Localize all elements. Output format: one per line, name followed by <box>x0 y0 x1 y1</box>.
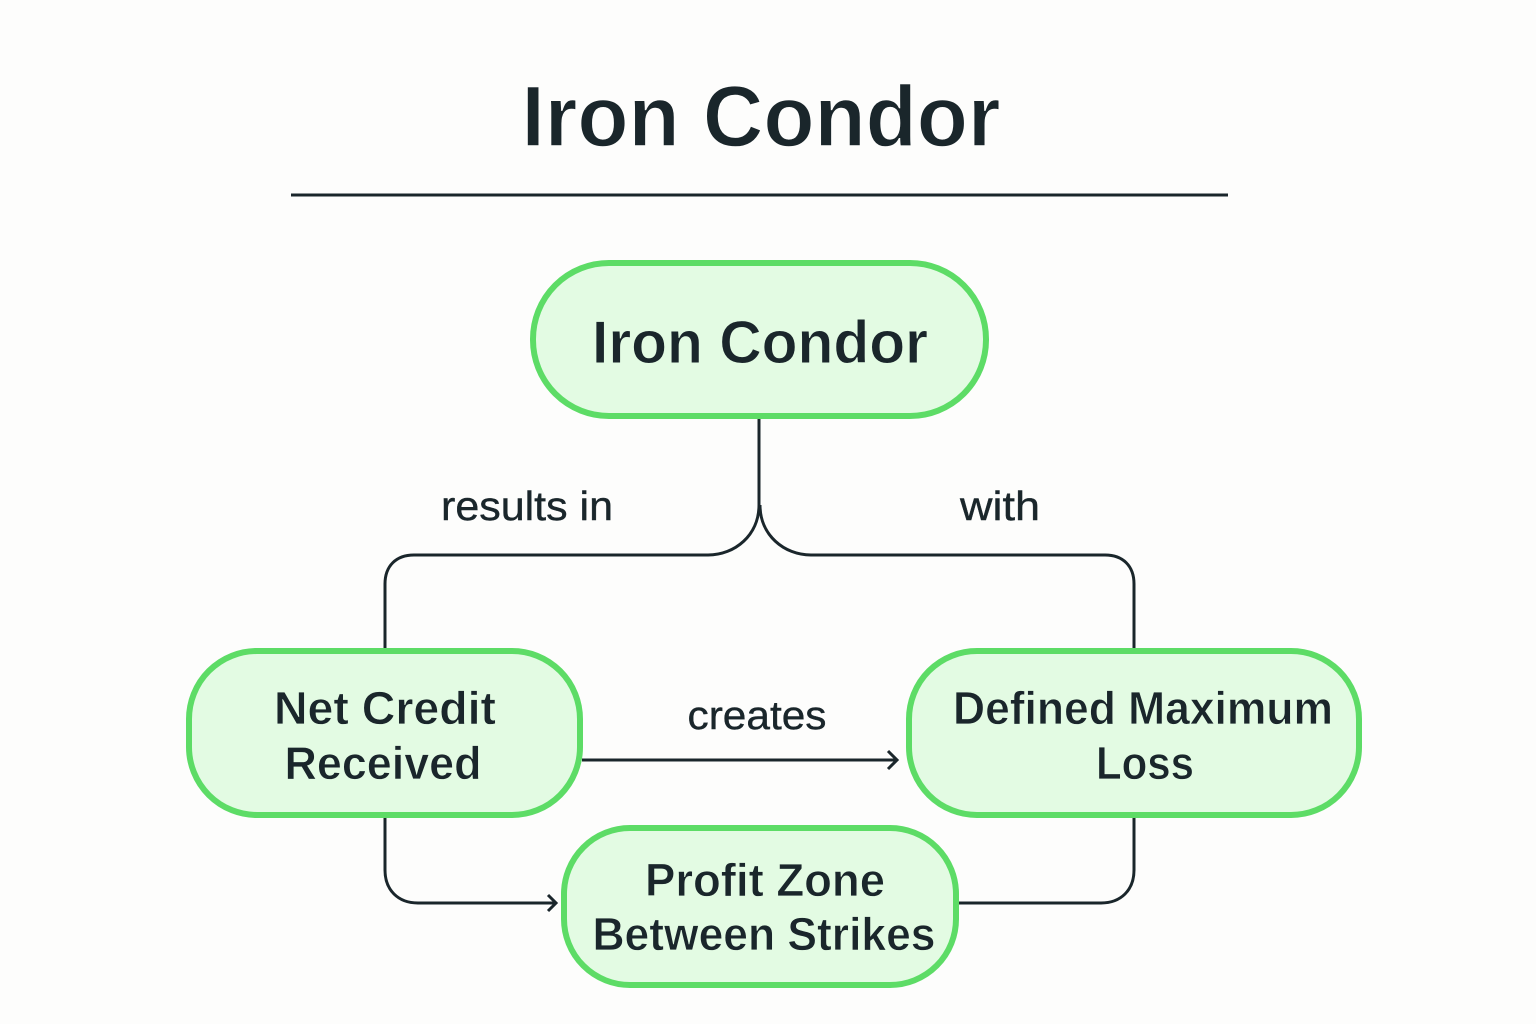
node: Defined Maximum Loss <box>909 651 1359 815</box>
title: Iron Condor <box>522 69 1000 165</box>
connector: top node to Net Credit Received <box>385 418 759 650</box>
node: Defined Maximum Loss: Defined Maximum <box>953 682 1333 734</box>
arrow: creates <box>582 751 897 769</box>
label: results in: results in <box>441 483 613 529</box>
label: creates: creates <box>688 694 826 738</box>
node: Defined Maximum Loss: Loss <box>1096 737 1194 789</box>
node: Iron Condor <box>533 263 986 416</box>
node: Net Credit Received: Net Credit <box>274 682 496 734</box>
node: Net Credit Received: Received <box>284 737 482 789</box>
arrow: Net Credit to Profit Zone <box>385 816 556 911</box>
node: Iron Condor: Iron Condor <box>592 309 928 376</box>
node: Profit Zone Between Strikes: Between Strikes <box>592 908 936 960</box>
node: Profit Zone Between Strikes: Profit Zone <box>645 854 885 906</box>
label: with: with <box>959 483 1040 529</box>
connector: Defined Maximum Loss to Profit Zone <box>958 816 1134 903</box>
node: Net Credit Received <box>189 651 580 815</box>
node: Profit Zone Between Strikes <box>564 828 956 985</box>
connector: top node to Defined Maximum Loss <box>760 505 1134 650</box>
